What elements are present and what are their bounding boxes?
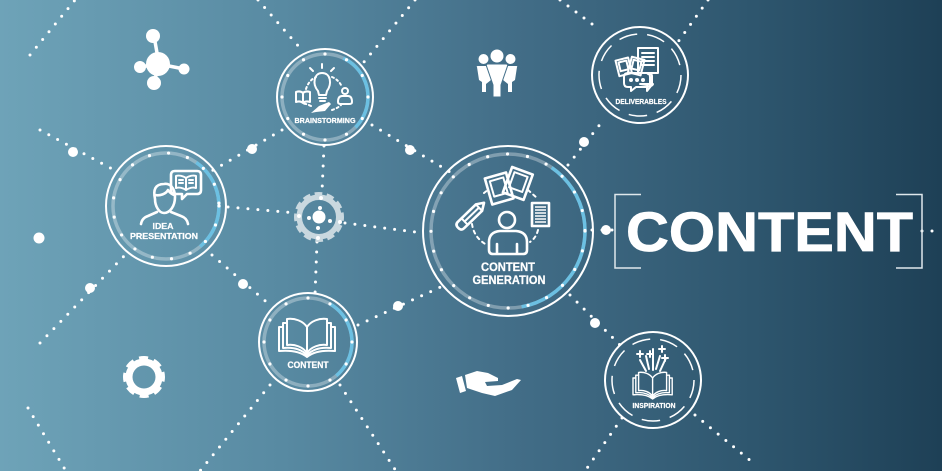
panel: content book [248,282,368,402]
icon: team of people [477,50,517,97]
label: deliverables: DELIVERABLES [616,99,667,106]
icon: molecule network [134,29,190,90]
icon: central cog node [296,194,342,240]
label: idea presentation: IDEA [152,221,174,231]
icon: lightbulb with book, pen and person [296,64,352,113]
label: brainstorming: BRAINSTORMING [294,116,356,125]
label: content generation: CONTENT [481,262,535,274]
icon: open book [279,319,335,357]
label: content: CONTENT [288,360,329,370]
panel: idea presentation: PRESENTATION [130,231,198,241]
label: inspiration: INSPIRATION [632,403,676,410]
icon: person with speech bubble [141,171,201,224]
panel: brainstorming [268,40,382,154]
panel: idea presentation [92,132,240,280]
connector node dots [34,137,611,328]
panel: inspiration [605,332,701,428]
icon: gear [125,358,163,396]
icon: open book with sparkles [633,346,672,399]
panel: content generation [401,124,615,338]
icon: documents and chat bubbles [615,48,658,91]
heading: content in brackets: CONTENT [626,200,913,263]
icon: open hand [456,371,521,396]
panel: deliverables [592,27,688,123]
icon: person with photos, pencil and document [455,167,549,254]
panel: content generation: GENERATION [472,275,546,287]
